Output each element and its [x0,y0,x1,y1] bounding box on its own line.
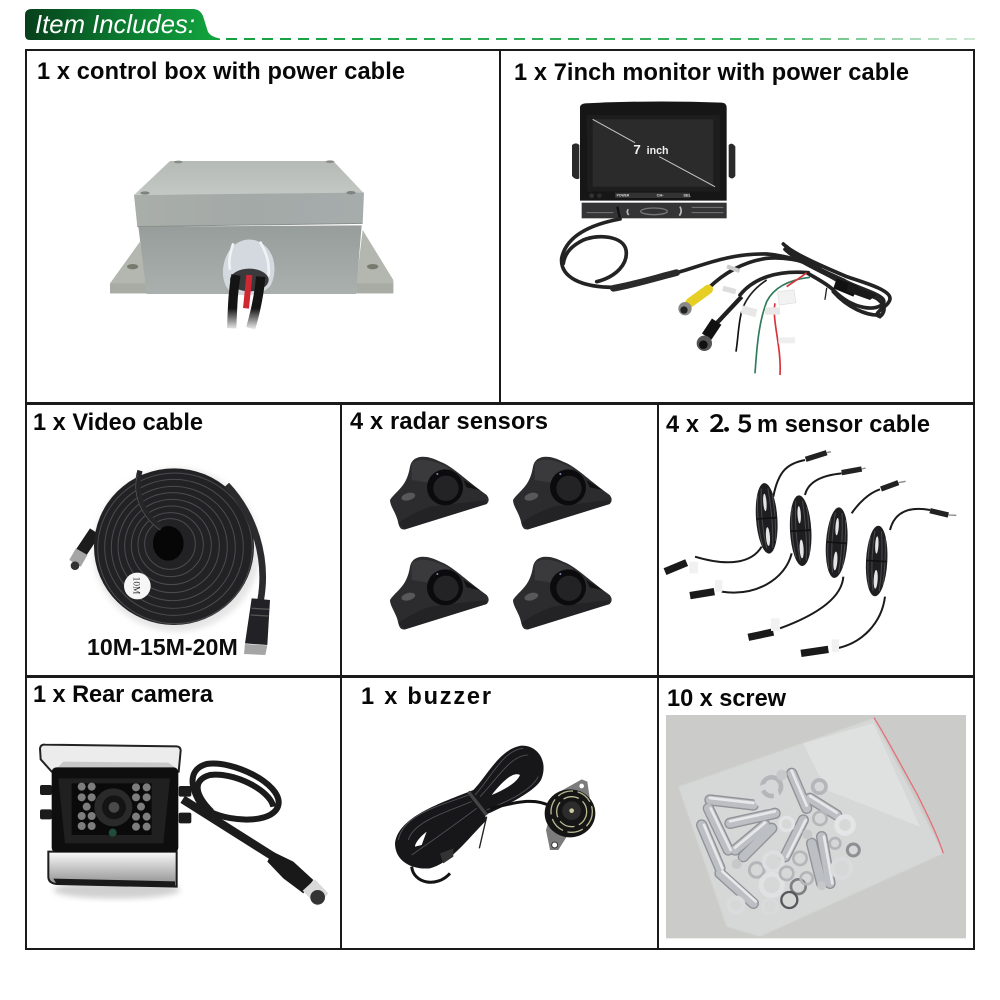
panel: rear camera [26,677,341,949]
image: bag of screws [666,715,966,938]
banner tab [25,9,220,40]
image: monitor [562,101,890,375]
title: sensor cable: 4 x [666,412,699,438]
image: buzzer [395,746,595,882]
cable length label: 10M-15M-20M [87,634,238,660]
panel: video cable [26,404,341,676]
header banner [25,9,975,40]
panel: buzzer [341,677,658,949]
image: four radar sensors [390,457,612,630]
title: buzzer: 1 x buzzer [361,684,491,710]
image: monitor: CH- [657,193,664,198]
image: coiled sensor cables [665,452,956,653]
title: monitor: 1 x 7inch monitor with power cable [514,60,909,86]
image: video cable [71,468,270,655]
title digits: ５ [733,412,757,438]
panel: radar sensors [341,404,658,676]
title digits: ２ [705,412,729,438]
image: control box [110,160,393,331]
title: radar sensors: 4 x radar sensors [350,409,548,435]
panel: sensor cables [658,404,974,676]
image: monitor: POWER [617,194,630,198]
banner heading: Item Includes: [35,9,195,39]
title remainder: m sensor cable [757,412,930,438]
title: rear camera: 1 x Rear camera [33,682,214,708]
title digits: ． [720,412,744,438]
title: screws: 10 x screw [667,686,787,712]
image: monitor: SEL [683,193,692,198]
panel: screws [658,677,974,949]
image: monitor: 7 [633,142,641,157]
dashed rule [226,38,975,40]
title: video cable: 1 x Video cable [33,410,203,436]
panel: monitor [500,50,974,403]
image: rear camera [40,745,328,906]
image: monitor: inch [647,145,669,157]
panel: control box [26,50,500,403]
title: control box: 1 x control box with power cable [37,59,405,85]
image: video cable: 10M [130,577,140,595]
